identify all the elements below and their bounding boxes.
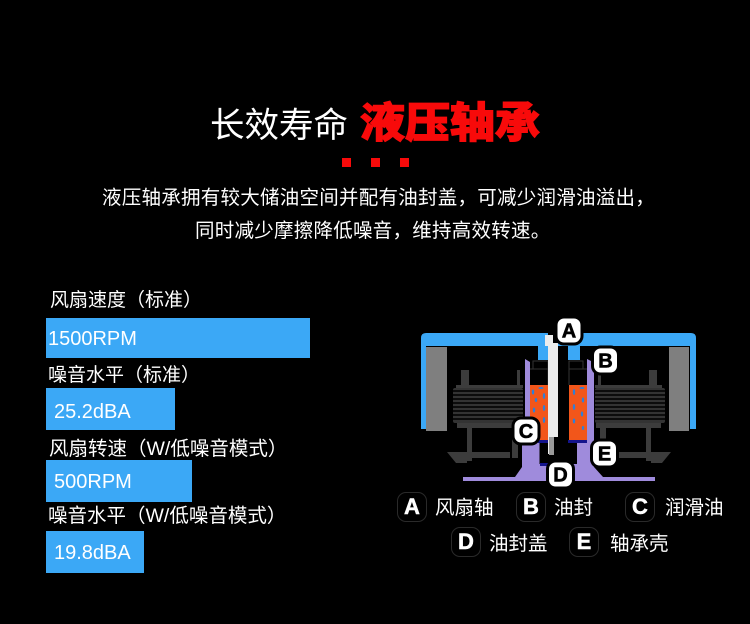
legend E: E [577, 529, 591, 554]
label: noise low noise: 噪音水平（W/低噪音模式） [48, 505, 286, 527]
description text: 液压轴承拥有较大储油空间并配有油封盖，可减少润滑油溢出， [102, 187, 655, 209]
stator left [447, 370, 523, 463]
oil seals [538, 440, 587, 466]
title [210, 99, 540, 147]
callout C [513, 418, 539, 444]
description text [102, 187, 655, 242]
legend [397, 492, 724, 557]
bar: 500RPM: 500RPM [54, 471, 132, 493]
label: noise standard: 噪音水平（标准） [48, 365, 200, 386]
oil droplets [532, 387, 584, 430]
legend E text: 轴承壳 [610, 533, 669, 555]
bar: 19.8dBA [46, 531, 144, 573]
callout B [592, 347, 618, 374]
legend B text: 油封 [554, 497, 593, 519]
legend A text: 风扇轴 [435, 497, 494, 519]
center lower recess [540, 443, 577, 463]
legend B [516, 492, 546, 522]
magnets [426, 347, 689, 431]
callout C: C [519, 421, 533, 443]
title: white part: 长效寿命 [210, 107, 348, 145]
bar: 500RPM [46, 460, 192, 502]
description text: 同时减少摩擦降低噪音，维持高效转速。 [195, 220, 551, 242]
label: fan speed low noise: 风扇转速（W/低噪音模式） [49, 438, 287, 460]
oil reservoirs [530, 385, 587, 440]
legend C: C [632, 494, 648, 519]
stator right [595, 370, 671, 463]
legend D: D [458, 529, 474, 554]
legend C text: 润滑油 [665, 497, 724, 519]
callout D [548, 461, 574, 488]
callout A: A [562, 320, 576, 342]
shaft [545, 335, 558, 454]
bar: 1500RPM [46, 318, 310, 358]
title: red part: 液压轴承 [360, 99, 540, 147]
legend D text: 油封盖 [489, 533, 548, 555]
bar: 1500RPM: 1500RPM [48, 328, 137, 350]
bearing housing [463, 359, 655, 481]
red dots [342, 158, 409, 167]
callout E: E [598, 444, 611, 466]
label: fan speed standard: 风扇速度（标准） [50, 290, 202, 311]
legend B: B [523, 494, 539, 519]
legend A [397, 492, 427, 522]
bar: 25.2dBA [46, 388, 175, 430]
bar: 19.8dBA: 19.8dBA [54, 542, 131, 564]
legend A: A [404, 494, 420, 519]
callout B: B [598, 350, 613, 372]
legend E [569, 527, 599, 557]
legend D [451, 527, 481, 557]
top bearing sleeves [530, 361, 587, 385]
callout A [556, 317, 582, 344]
callout E [592, 440, 618, 467]
legend C [625, 492, 655, 522]
fan cap [421, 333, 696, 429]
bar: 25.2dBA: 25.2dBA [54, 401, 131, 423]
callout D: D [553, 464, 568, 486]
